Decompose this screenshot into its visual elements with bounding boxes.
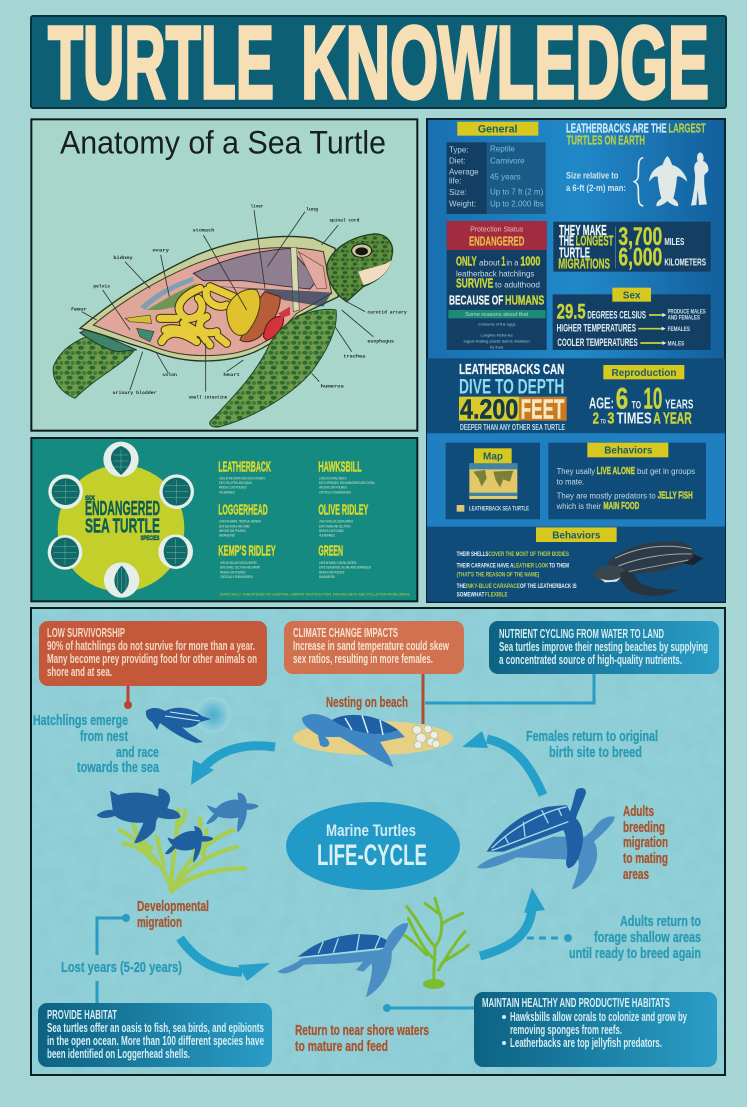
migrations box: MIGRATIONS <box>558 256 610 272</box>
general table: Up to 2,000 lbs <box>490 200 544 209</box>
protection status box: 1 <box>501 255 505 269</box>
center oval: life-cycle: LIFE-CYCLE <box>317 839 427 872</box>
anatomy labels: urinary bladder <box>113 390 157 396</box>
icon: hatchling turtle <box>146 708 211 743</box>
species notes: EATS CRABS, JELLYFISH AND SHRIMP <box>220 566 260 570</box>
size comparison: Size relative to <box>566 170 619 180</box>
dive depth: FEET <box>521 394 564 425</box>
sex box: COOLER TEMPERATURES <box>557 337 638 349</box>
shell behaviors: SOMEWHAT <box>457 592 484 599</box>
general label <box>457 122 538 136</box>
turtle illustration <box>53 234 393 427</box>
species list: GREEN <box>318 544 343 560</box>
icon: mating adult turtles <box>477 788 615 889</box>
sex box: FEMALES <box>668 326 690 333</box>
general table: Diet: <box>449 156 465 165</box>
map box <box>446 443 540 519</box>
sex box: MALES <box>668 341 684 348</box>
anatomy leader lines <box>82 210 373 392</box>
migrations box: 6,000 <box>618 244 662 272</box>
size comparison: a 6-ft (2-m) man: <box>566 183 626 193</box>
callout: climate change impacts: CLIMATE CHANGE IMPACTS <box>293 625 398 640</box>
anatomy labels: small intestine <box>189 395 227 401</box>
species notes: ENDANGERED <box>219 534 235 538</box>
species notes: LIVES IN THE PACIFIC AND SOUTH ATLANTIC <box>219 476 266 480</box>
title banner <box>31 5 726 120</box>
icon: leatherback turtle <box>593 541 703 596</box>
cycle stage labels: Return to near shore waters <box>295 1022 429 1039</box>
largest turtles heading: LEATHERBACKS ARE THE <box>566 121 667 135</box>
general table: life: <box>449 176 461 185</box>
species footnote: ESPECIALLY THREATENED BY HUNTING, HABITAT DESTRUCTION, FISHING NETS AND POLLUTION WORLDWIDE <box>220 592 410 597</box>
protection status box: Longline Fisheries <box>480 333 513 338</box>
center oval: life-cycle <box>286 802 460 890</box>
callout: provide habitat: PROVIDE HABITAT <box>47 1007 117 1022</box>
behaviors box: but get in groups <box>637 467 695 476</box>
reproduction: 3 <box>607 410 614 427</box>
protection status box: by food <box>490 344 503 349</box>
reproduction: AGE: <box>589 395 614 412</box>
species notes: LIVES IN SHALLOW, COASTAL WATERS <box>319 520 353 524</box>
species notes: ENDANGERED <box>319 575 335 579</box>
icon: jelly bubble <box>195 697 231 733</box>
shell behaviors: Behaviors <box>552 530 601 541</box>
behaviors box: MAIN FOOD <box>603 501 639 512</box>
shell behaviors: TO THEM <box>549 562 569 569</box>
cycle stage labels: from nest <box>80 728 128 745</box>
protection status box: Ingest floating plastic debris mistaken <box>464 338 530 343</box>
protection status box: to adulthood <box>495 280 540 289</box>
shell behaviors: THE <box>457 583 466 590</box>
behaviors box: Behaviors <box>604 446 653 457</box>
general table: Weight: <box>449 200 476 209</box>
sex box: 29.5 <box>557 299 586 323</box>
cycle stage labels: Females return to original <box>526 728 658 745</box>
shell behaviors: COVER THE MOST OF THEIR BODIES <box>488 551 569 558</box>
anatomy labels: lung <box>306 207 318 213</box>
intestines <box>160 287 233 345</box>
migrations box: KILOMETERS <box>664 258 706 269</box>
general table: Size: <box>449 188 467 197</box>
general label: General <box>478 123 518 135</box>
cycle stage labels: Developmental <box>137 898 209 915</box>
anatomy labels: carotid artery <box>367 309 407 315</box>
species notes: LIVES IN SHALLOW COASTAL WATERS <box>220 561 257 565</box>
general table: 45 years <box>490 173 521 182</box>
world map <box>469 463 517 499</box>
species notes: WEIGHS 100 POUNDS <box>220 570 246 574</box>
shell behaviors: THEIR SHELLS <box>457 551 489 558</box>
anatomy labels: stomach <box>193 228 214 234</box>
connector lines <box>97 674 594 1008</box>
dive depth: DIVE TO DEPTH <box>459 374 564 398</box>
migrations box: THE <box>559 234 574 250</box>
behaviors box: They are mostly predators to <box>557 491 656 500</box>
species notes: WEIGHS 400 POUNDS <box>319 570 345 574</box>
general table: Reptile <box>490 145 515 154</box>
map box: LEATHERBACK SEA TURTLE <box>469 506 529 513</box>
cycle stage labels: to mating <box>623 850 668 867</box>
anatomy labels: esophagus <box>367 339 394 345</box>
cycle stage labels: Adults <box>623 803 654 820</box>
reproduction: 10 <box>643 382 662 415</box>
protection status box: about <box>479 259 501 268</box>
species notes: CRITICALLY ENDANGERED <box>319 490 351 494</box>
species notes: EATS SEAGRASS, ALGAE AND SEAWEEDS <box>319 566 371 570</box>
anatomy labels: pelvis <box>93 284 110 290</box>
migrations box: 3,700 <box>618 223 662 251</box>
species notes: EATS SEA SNAILS AND CRABS <box>219 524 250 528</box>
arrows: life-cycle direction <box>180 731 545 981</box>
anatomy labels <box>71 203 407 401</box>
species list: HAWKSBILL <box>318 460 362 476</box>
migrations box: LONGEST <box>576 234 613 250</box>
species list: LOGGERHEAD <box>218 502 268 518</box>
center oval: life-cycle: Marine Turtles <box>326 821 416 840</box>
species notes: VULNERABLE <box>219 490 235 494</box>
callout: low survivorship: Many become prey providing food for other animals on <box>47 651 257 666</box>
sex box: Sex <box>623 290 641 301</box>
protection status box: ENDANGERED <box>469 234 525 249</box>
general table <box>447 142 546 214</box>
cycle stage labels: towards the sea <box>77 759 159 776</box>
dive depth <box>459 362 567 432</box>
shell behaviors: INKY-BLUE CARAPACE <box>466 583 520 590</box>
upper facts <box>447 121 711 350</box>
cycle stage labels: breeding <box>623 819 665 836</box>
behaviors box: They usally <box>557 467 595 476</box>
shell behaviors: THEIR CARAPACE HAVE A <box>457 562 513 569</box>
largest turtles heading <box>566 121 706 147</box>
cycle stage labels: areas <box>623 866 649 883</box>
callout: provide habitat: Sea turtles offer an oasis to fish, sea birds, and epibionts <box>47 1020 264 1035</box>
title <box>48 5 709 120</box>
species notes: WEIGHS 100 POUNDS <box>319 529 344 533</box>
icon: swimming turtle and green coral <box>277 898 468 997</box>
sex box: PRODUCE MALES <box>668 309 706 316</box>
species notes: EATS JELLYFISH AND SQUID <box>219 481 252 485</box>
protection status box: Protection Status <box>470 227 524 234</box>
callout: nutrient cycling <box>489 621 719 674</box>
protection status box: ONLY <box>456 255 477 269</box>
callout: provide habitat: in the open ocean. More than 100 different species have <box>47 1033 264 1048</box>
cycle stage labels: and race <box>116 744 159 761</box>
reproduction: YEARS <box>665 396 693 411</box>
reproduction: TIMES <box>617 410 652 427</box>
shell behaviors: (THAT'S THE REASON OF THE NAME) <box>457 572 539 579</box>
species notes: LIVES IN WARM, TROPICAL WATERS <box>219 520 261 524</box>
protection status box <box>447 221 547 350</box>
cycle stage labels: forage shallow areas <box>594 929 701 946</box>
anatomy labels: ovary <box>152 248 169 254</box>
cycle stage labels: to mature and feed <box>295 1038 388 1055</box>
species notes: VULNERABLE <box>319 534 335 538</box>
icon: leatherback silhouette <box>649 156 687 206</box>
anatomy labels: colon <box>162 372 177 378</box>
callout: low survivorship: LOW SURVIVORSHIP <box>47 625 125 640</box>
species list: LEATHERBACK <box>218 460 271 476</box>
reproduction: A YEAR <box>653 410 692 427</box>
anatomy labels: trachea <box>343 353 365 359</box>
anatomy labels: spinal cord <box>329 218 359 224</box>
protection status box: in a <box>506 259 519 268</box>
callout: climate change impacts <box>284 621 464 674</box>
anatomy labels: heart <box>223 372 240 378</box>
general table: Up to 7 ft (2 m) <box>490 187 544 196</box>
wheel heading: ENDANGERED <box>85 497 160 520</box>
species notes: WEIGHS 2,000 POUNDS <box>219 486 247 490</box>
shell behaviors: OF THE LEATHERBACK IS <box>520 583 577 590</box>
species list: KEMP'S RIDLEY <box>218 544 276 560</box>
species notes: LIVES IN WARM, COASTAL WATERS <box>319 561 357 565</box>
callout: climate change impacts: Increase in sand temperature could skew <box>293 638 450 653</box>
species notes: CRITICALLY ENDANGERED <box>220 575 253 579</box>
reproduction: Reproduction <box>612 368 676 379</box>
callout: provide habitat: been identified on Loggerhead shells. <box>47 1046 190 1061</box>
largest turtles heading: LARGEST <box>668 121 706 135</box>
callout: low survivorship: 90% of hatchlings do not survive for more than a year. <box>47 638 255 653</box>
behaviors box: LIVE ALONE <box>597 466 635 477</box>
cycle stage labels: until ready to breed again <box>569 945 701 962</box>
migrations box: MILES <box>664 237 685 248</box>
heading: anatomy: Anatomy of a Sea Turtle <box>60 124 386 160</box>
species notes: WEIGHS 300 POUNDS <box>319 486 347 490</box>
reproduction <box>589 365 693 427</box>
icon: man silhouette <box>691 152 708 206</box>
behaviors box: which is their <box>556 502 601 511</box>
panel: leatherback facts <box>427 119 725 602</box>
panel: six endangered sea turtle species: OLIVE RIDLEY <box>318 502 368 518</box>
wheel heading: SIX <box>85 495 96 502</box>
behaviors box: JELLY FISH <box>658 490 693 501</box>
coral <box>403 898 468 980</box>
species wheel <box>48 442 194 598</box>
species notes: WEIGHS 350 POUNDS <box>219 529 246 533</box>
callout: provide habitat <box>38 1003 272 1067</box>
cycle stage labels: migration <box>137 914 182 931</box>
species notes: EATS SPONGES, SEA ANEMONES AND CORAL <box>319 481 375 485</box>
protection status box: 1000 <box>520 255 540 269</box>
panel: marine turtles life-cycle <box>31 608 725 1075</box>
cycle stage labels <box>33 694 701 1055</box>
anatomy labels: kidney <box>113 255 133 261</box>
behaviors box <box>548 443 706 519</box>
cycle stage labels: birth site to breed <box>549 744 642 761</box>
general table: Carnivore <box>490 156 525 165</box>
anatomy labels: humerus <box>321 383 344 389</box>
protection status box: Some reasons about that <box>465 312 529 318</box>
callout: maintain healthy habitats: removing sponges from reefs. <box>510 1022 622 1037</box>
icon: coral with hatchlings <box>97 788 258 892</box>
eggs <box>412 725 440 749</box>
callout: low survivorship: shore and at sea. <box>47 664 112 679</box>
wheel heading <box>85 495 160 542</box>
sex box: DEGREES CELSIUS <box>587 309 646 321</box>
migrations box: TURTLE <box>559 245 590 261</box>
size comparison <box>566 152 708 206</box>
wheel heading: SPECIES <box>141 535 160 542</box>
reproduction: 2 <box>593 410 599 427</box>
sex box: HIGHER TEMPERATURES <box>557 323 636 335</box>
lower facts <box>427 358 725 602</box>
callout: low survivorship <box>39 621 267 686</box>
cycle stage labels: Adults return to <box>620 913 701 930</box>
reproduction: 6 <box>616 382 628 415</box>
anatomy labels: femur <box>71 307 87 313</box>
protection status box: BECAUSE OF <box>449 292 503 307</box>
sex box <box>553 288 711 350</box>
callout: maintain healthy habitats <box>474 992 717 1067</box>
map box: Map <box>483 451 503 462</box>
species notes: LIVES IN CORAL REEFS <box>319 476 347 480</box>
dive depth: DEEPER THAN ANY OTHER SEA TURTLE <box>460 423 565 432</box>
cycle stage labels: migration <box>623 834 668 851</box>
callout: climate change impacts: sex ratios, resulting in more females. <box>293 651 433 666</box>
cycle stage labels: Nesting on beach <box>326 694 408 711</box>
protection status box: SURVIVE <box>456 276 493 290</box>
behaviors box: to mate. <box>557 477 584 486</box>
species notes <box>219 476 375 579</box>
general table: Average <box>449 167 479 176</box>
title: TURTLE <box>48 5 274 120</box>
reproduction: TO <box>601 418 606 425</box>
species list <box>218 460 368 560</box>
shell behaviors: FLEXIBLE <box>485 592 508 599</box>
species notes: EATS CRABS AND JELLYFISH <box>319 524 351 528</box>
dive depth: 4.200 <box>460 394 518 425</box>
largest turtles heading: TURTLES ON EARTH <box>567 133 645 147</box>
protection status box: HUMANS <box>505 292 544 307</box>
protection status box: Consume of the eggs <box>478 322 516 327</box>
icon: nesting turtle on sand <box>293 714 453 767</box>
general table: Type: <box>449 145 469 154</box>
anatomy labels: liver <box>251 203 263 209</box>
panel: anatomy of a sea turtle <box>31 119 417 431</box>
protection status box: leatherback hatchlings <box>456 270 534 279</box>
migrations box: THEY MAKE <box>559 223 607 239</box>
panel: six endangered sea turtle species <box>31 438 417 601</box>
shell behaviors <box>457 527 617 599</box>
sex box: AND FEMALES <box>668 315 700 322</box>
shell behaviors: LEATHER LOOK <box>513 562 548 569</box>
cycle stage labels: Hatchlings emerge <box>33 712 128 729</box>
reproduction: TO <box>632 399 641 411</box>
wheel heading: SEA TURTLE <box>85 514 160 537</box>
cycle stage labels: Lost years (5-20 years) <box>61 959 182 976</box>
migrations box <box>553 222 711 272</box>
dive depth: LEATHERBACKS CAN <box>459 362 564 378</box>
